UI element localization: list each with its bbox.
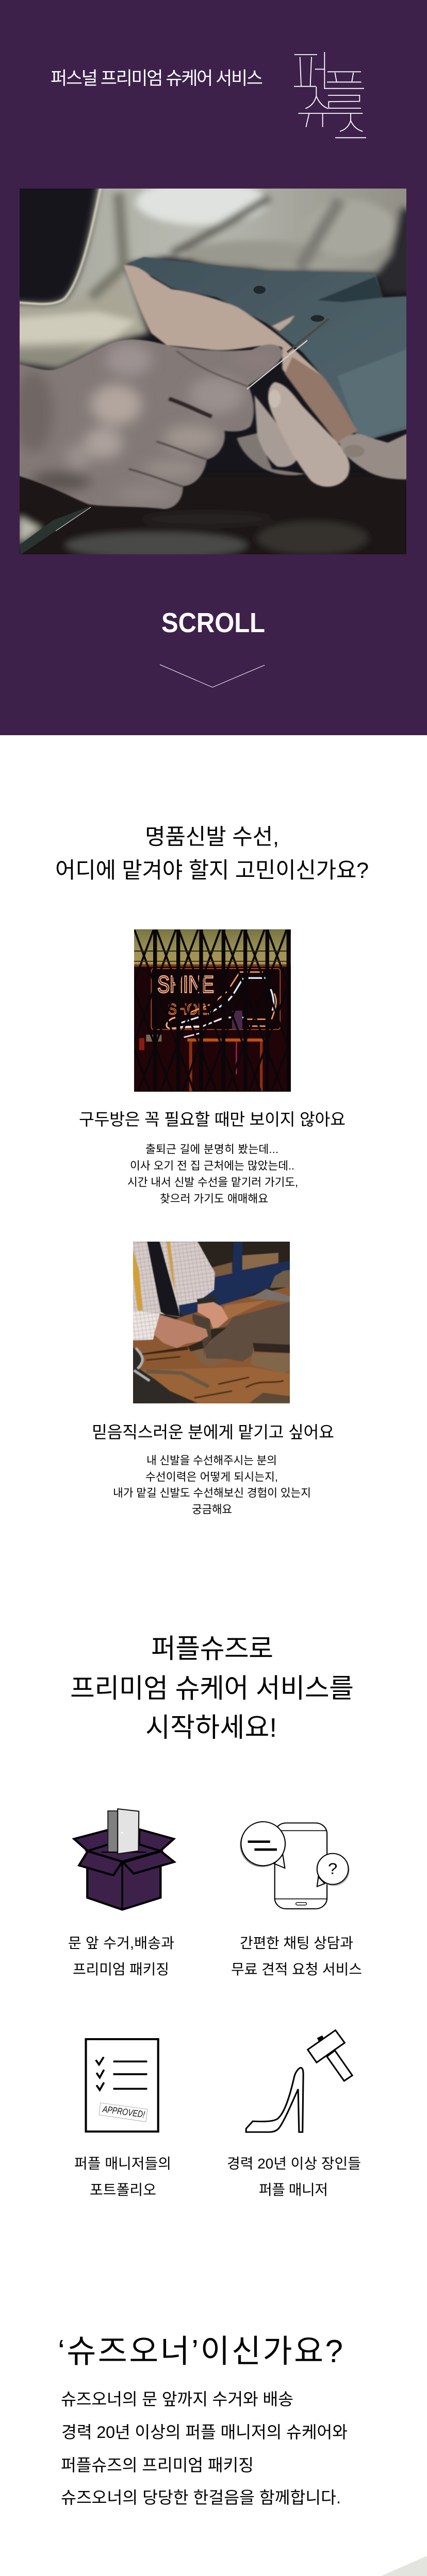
panel: problem section xyxy=(55,825,369,1516)
heading: start premium shoe care: 퍼플슈즈로 xyxy=(151,1634,273,1664)
panel: service features xyxy=(68,1634,362,2198)
body text: shoe owner: 슈즈오너의 당당한 한걸음을 함께합니다. xyxy=(61,2488,341,2507)
body text: shoe owner: 슈즈오너의 문 앞까지 수거와 배송 xyxy=(61,2390,293,2409)
shirt xyxy=(20,189,406,330)
feature label: portfolio xyxy=(74,2156,171,2198)
arrow: scroll down chevron xyxy=(160,665,265,687)
photo: craftsman cutting tweed on a wooden table xyxy=(133,1242,290,1404)
feature label: craftsmen: 퍼플 매니저 xyxy=(259,2182,328,2198)
foam xyxy=(123,264,323,376)
feature label: pickup and packaging: 문 앞 수거,배송과 xyxy=(68,1935,174,1951)
body text: shoe shops: 이사 오기 전 집 근처에는 많았는데.. xyxy=(130,1160,294,1172)
sole xyxy=(126,257,418,443)
heading: where to repair: 명품신발 수선, xyxy=(145,825,279,850)
feature label: chat and quote xyxy=(231,1935,362,1977)
body text: shoe shops: 시간 내서 신발 수선을 맡기러 가기도, xyxy=(127,1176,298,1189)
heading: start premium shoe care: 프리미엄 슈케어 서비스를 xyxy=(70,1674,354,1704)
hero purple background xyxy=(0,0,427,735)
feature label: pickup and packaging xyxy=(68,1935,174,1977)
panel: shoe owner xyxy=(58,2334,348,2507)
table xyxy=(8,475,418,561)
heading: start premium shoe care: 시작하세요! xyxy=(145,1713,277,1743)
logo: 퍼플슈즈 line lettering xyxy=(294,52,366,138)
body text: trustworthy: 내 신발을 수선해주시는 분의 xyxy=(146,1454,277,1467)
right hand xyxy=(237,433,305,476)
feature label: craftsmen: 경력 20년 이상 장인들 xyxy=(227,2156,361,2172)
icon: approved checklist document xyxy=(86,2039,158,2131)
icon: high heel and hammer xyxy=(246,2030,352,2132)
left hand xyxy=(15,340,283,509)
body text: shoe owner: 경력 20년 이상의 퍼플 매니저의 슈케어와 xyxy=(61,2423,348,2442)
scroll label: SCROLL xyxy=(161,607,265,638)
body text: shoe owner: 퍼플슈즈의 프리미엄 패키징 xyxy=(61,2456,254,2475)
heading: where to repair: 어디에 맡겨야 할지 고민이신가요? xyxy=(55,858,369,883)
heading: where to repair xyxy=(55,825,369,883)
feature label: portfolio: 퍼플 매니저들의 xyxy=(74,2156,171,2172)
heading: start premium shoe care xyxy=(70,1634,354,1743)
feature label: chat and quote: 간편한 채팅 상담과 xyxy=(240,1935,353,1951)
icon: open box with door xyxy=(74,1809,174,1910)
subheading: shoe shops: 구두방은 꼭 필요할 때만 보이지 않아요 xyxy=(79,1110,346,1129)
feature label: craftsmen xyxy=(227,2156,361,2198)
icon: approved checklist document: APPROVED! xyxy=(102,2104,145,2120)
diagonal grey band xyxy=(0,2556,427,2576)
photo: neon shoe shine sign behind gate xyxy=(134,929,291,1092)
body text: trustworthy: 궁금해요 xyxy=(192,1503,232,1516)
heading: shoe owner: ‘슈즈오너’이신가요? xyxy=(58,2334,343,2369)
photo: neon shoe shine sign behind gate: SHINE xyxy=(157,971,214,998)
body text: shoe owner xyxy=(61,2390,348,2507)
knife xyxy=(247,341,307,389)
hero photo: hands repairing a shoe sole xyxy=(8,178,418,561)
gate xyxy=(134,929,290,1091)
feature label: chat and quote: 무료 견적 요청 서비스 xyxy=(231,1961,362,1977)
body text: shoe shops: 출퇴근 길에 분명히 봤는데... xyxy=(145,1143,278,1156)
subheading: trustworthy: 믿음직스러운 분에게 맡기고 싶어요 xyxy=(92,1423,334,1442)
feature label: pickup and packaging: 프리미엄 패키징 xyxy=(73,1961,169,1977)
hero tagline: 퍼스널 프리미엄 슈케어 서비스 xyxy=(51,69,263,89)
icon: phone with chat bubbles: ? xyxy=(328,1859,337,1877)
panel: hero xyxy=(0,0,427,735)
body text: shoe shops xyxy=(127,1143,298,1205)
feature label: portfolio: 포트폴리오 xyxy=(90,2182,156,2198)
photo: neon shoe shine sign behind gate: SHOE xyxy=(168,1001,207,1018)
icon: phone with chat bubbles xyxy=(240,1822,350,1909)
body text: trustworthy xyxy=(113,1454,311,1516)
body text: shoe shops: 찾으러 가기도 애매해요 xyxy=(160,1193,268,1205)
body text: trustworthy: 내가 맡길 신발도 수선해보신 경험이 있는지 xyxy=(113,1487,311,1499)
body text: trustworthy: 수선이력은 어떻게 되시는지, xyxy=(145,1471,278,1483)
